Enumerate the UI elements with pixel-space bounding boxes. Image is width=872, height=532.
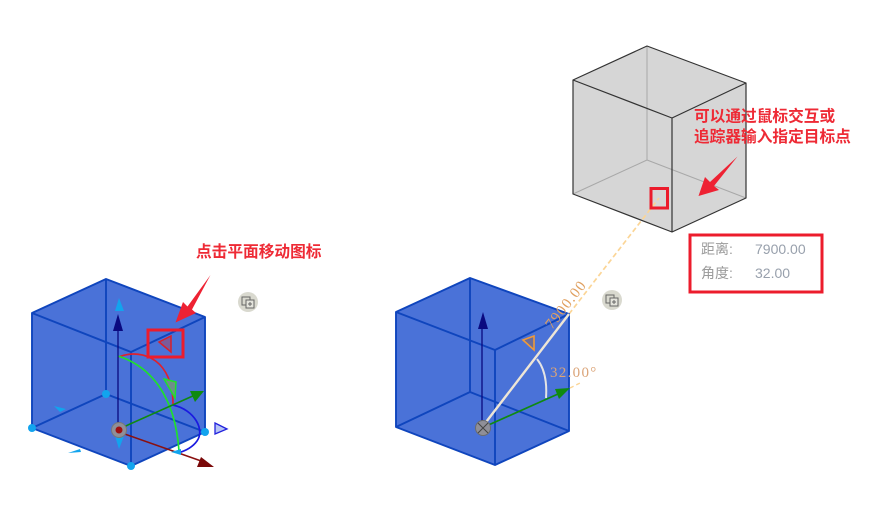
right gizmo: origin bbox=[476, 420, 490, 436]
left red arrow bbox=[176, 275, 210, 322]
orange plane handle bbox=[523, 336, 534, 350]
tracker input panel: 角度: bbox=[701, 265, 733, 281]
right blue cube bbox=[396, 278, 569, 465]
dashed extension line bbox=[570, 383, 580, 388]
left caption: 点击平面移动图标 bbox=[196, 242, 322, 261]
tracker input panel: 距离: bbox=[701, 241, 733, 257]
icon: left add-view button bbox=[238, 292, 258, 312]
target point red box bbox=[651, 188, 668, 208]
left blue cube bbox=[32, 279, 205, 466]
gray target cube bbox=[573, 46, 746, 232]
tracker input panel: 32.00 bbox=[755, 265, 790, 281]
distance line bbox=[483, 314, 569, 426]
right caption: 可以通过鼠标交互或 bbox=[694, 106, 835, 126]
left gizmo: plane handles bbox=[159, 336, 227, 434]
right caption bbox=[694, 106, 851, 146]
right gizmo: vertical axis bbox=[478, 312, 488, 425]
distance label: 7900.00 bbox=[543, 278, 590, 332]
left red highlight box bbox=[148, 330, 183, 357]
right gizmo: green axis bbox=[484, 388, 570, 427]
left gizmo: axes bbox=[113, 314, 214, 467]
icon: right add-view button bbox=[602, 290, 622, 310]
right caption: 追踪器输入指定目标点 bbox=[694, 127, 851, 146]
left gizmo: rotation arcs bbox=[118, 354, 200, 453]
tracker input panel bbox=[690, 235, 822, 292]
right red arrow bbox=[698, 156, 738, 196]
dashed guide line to target bbox=[569, 198, 659, 314]
left gizmo: cyan handles bbox=[28, 298, 209, 470]
angle arc bbox=[537, 359, 546, 398]
tracker input panel: 7900.00 bbox=[755, 241, 806, 257]
angle label: 32.00° bbox=[550, 365, 598, 381]
left gizmo: origin bbox=[112, 422, 126, 438]
